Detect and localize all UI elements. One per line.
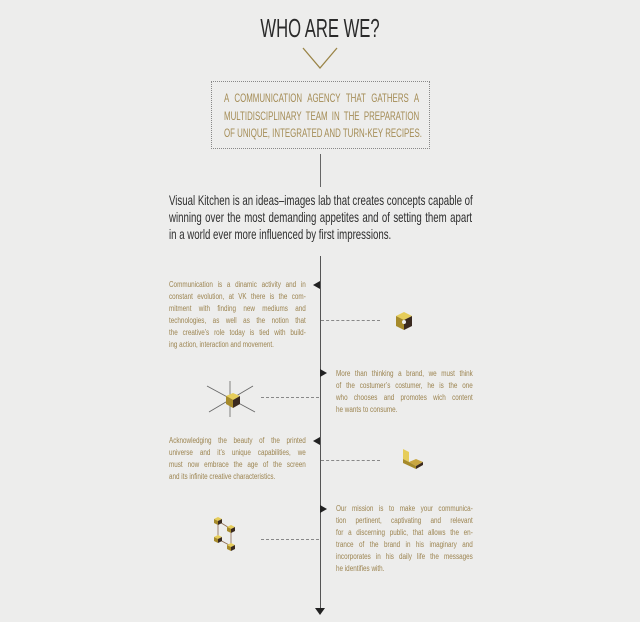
arrow 1 [313,281,320,289]
text block 1: mitment with finding new mediums and [169,304,306,313]
icon: connected cubes [214,517,235,551]
text block 1: Communication is a dinamic activity and in [169,280,306,289]
tagline box: OF UNIQUE, INTEGRATED AND TURN-KEY RECIPES. [224,127,422,140]
text block 3: and its infinite creative characteristics. [169,472,275,481]
text block 1 [169,280,306,349]
icon: cube 1 [396,312,412,330]
text block 3: Acknowledging the beauty of the printed [169,436,306,445]
intro paragraph [169,193,473,242]
text block 4: Our mission is to make your communica- [336,504,473,513]
text block 4: incorporates in his daily life the messages [336,552,473,561]
timeline line [320,256,321,610]
text block 1: technologies, as well as the notion that [169,316,306,325]
intro paragraph: in a world ever more influenced by first impressions. [169,227,391,242]
text block 2: More than thinking a brand, we must think [336,369,473,378]
timeline line top [320,154,321,187]
tagline box: MULTIDISCIPLINARY TEAM IN THE PREPARATION [224,110,419,122]
tagline box: A COMMUNICATION AGENCY THAT GATHERS A [224,92,419,105]
text block 2: of the costumer’s costumer, he is the one [336,381,473,390]
text block 3 [169,436,306,481]
icon: chevron [302,48,338,69]
intro paragraph: winning over the most demanding appetites and of setting them apart [169,210,472,225]
text block 2 [336,369,473,414]
text block 1: ing action, interaction and movement. [169,340,274,349]
arrow 2 [320,369,327,377]
text block 4: he identifies with. [336,564,384,573]
tagline box [211,81,430,149]
arrow 4 [320,505,327,513]
text block 1: the creative’s role today is tied with build- [169,328,306,337]
text block 4: tion pertinent, captivating and relevant [336,516,473,525]
text block 4: for a discerning public, that allows the en- [336,528,473,537]
arrow: timeline end [315,608,325,615]
text block 2: he wants to consume. [336,405,397,414]
text block 3: universe and it’s unique capabilities, we [169,448,306,457]
icon: L block [403,449,423,469]
text block 4: trance of the brand in his imaginary and [336,540,473,549]
icon: star cube [206,381,256,417]
title: WHO ARE WE? [260,13,380,43]
intro paragraph: Visual Kitchen is an ideas–images lab that creates concepts capable of [169,193,473,208]
text block 1: constant evolution, at VK there is the com- [169,292,306,301]
text block 2: who chooses and promotes wich content [336,393,473,402]
text block 4 [336,504,473,573]
arrow 3 [313,437,320,445]
text block 3: must now embrace the age of the screen [169,460,306,469]
